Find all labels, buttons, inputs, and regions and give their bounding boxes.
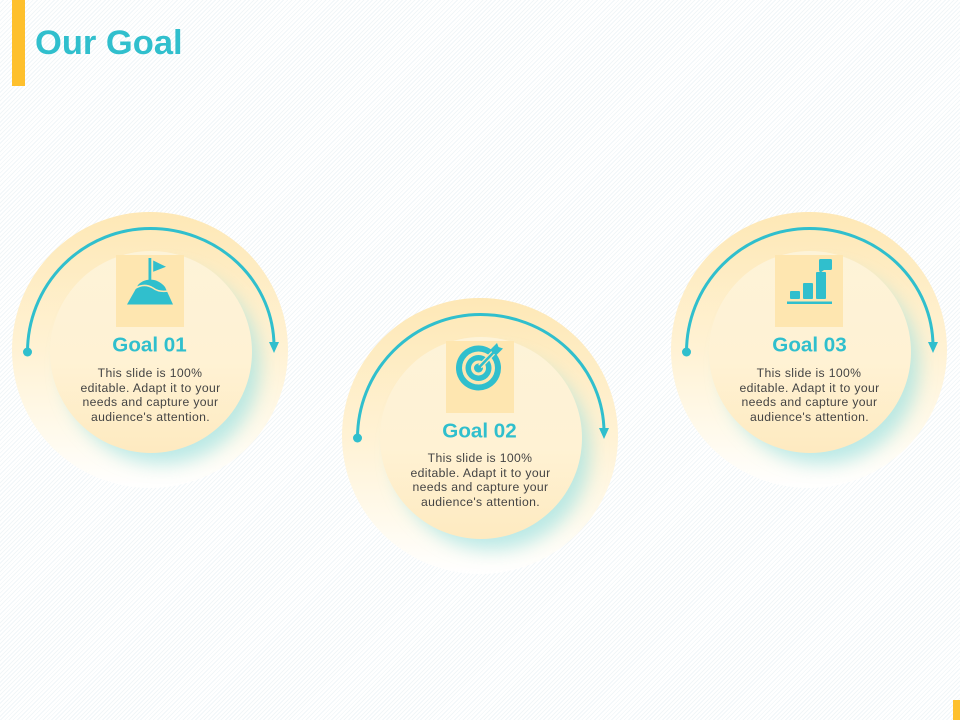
body text: audience's attention. — [421, 495, 540, 509]
icon backing — [446, 341, 514, 413]
inner circle shadow — [394, 354, 590, 550]
arc arrow — [353, 314, 609, 442]
inner circle shadow — [723, 268, 919, 464]
body text: editable. Adapt it to your — [80, 381, 221, 395]
body text: needs and capture your — [83, 395, 218, 409]
panel: goal 03 — [671, 212, 947, 488]
outer circle — [12, 212, 288, 488]
title: Our Goal — [35, 24, 183, 62]
inner circle — [709, 251, 911, 453]
inner circle — [50, 251, 252, 453]
body text: editable. Adapt it to your — [410, 466, 551, 480]
body text: This slide is 100% — [428, 451, 532, 465]
body text: This slide is 100% — [757, 366, 861, 380]
body text: audience's attention. — [750, 410, 869, 424]
heading: Goal 03 — [772, 334, 847, 356]
body text: audience's attention. — [91, 410, 210, 424]
icon backing — [775, 255, 843, 327]
arc arrow — [23, 228, 279, 356]
panel: goal 01 — [12, 212, 288, 488]
outer circle — [342, 298, 618, 574]
arc arrow — [682, 228, 938, 356]
panel: goal 02 — [342, 298, 618, 574]
title accent bar — [12, 0, 25, 86]
corner accent — [953, 700, 960, 720]
inner circle — [380, 337, 582, 539]
heading: Goal 02 — [442, 420, 517, 442]
body text: editable. Adapt it to your — [739, 381, 880, 395]
icon: flag on mountain — [127, 258, 173, 304]
body text: needs and capture your — [413, 480, 548, 494]
body text: This slide is 100% — [98, 366, 202, 380]
icon: bar chart with flag — [787, 259, 832, 304]
outer circle — [671, 212, 947, 488]
heading: Goal 01 — [112, 334, 187, 356]
body text: needs and capture your — [742, 395, 877, 409]
icon backing — [116, 255, 184, 327]
inner circle shadow — [64, 268, 260, 464]
icon: target — [456, 343, 503, 390]
